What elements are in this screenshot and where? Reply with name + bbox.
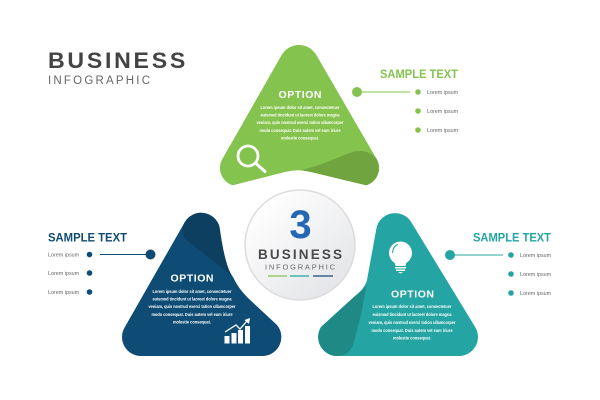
legend: blue: Lorem ipsum [48,290,80,296]
legend: blue: SAMPLE TEXT [48,230,128,244]
blue option text [148,272,236,324]
green option text [256,89,344,140]
blue option text: modo consequat. Duis autem vel eum iriure [152,312,233,317]
panel: blue option triangle [122,213,281,356]
teal option text: OPTION [391,288,434,300]
teal option text: veniam, quis nostrud exerci tation ullamcorper [368,320,456,325]
green option text: Lorem ipsum dolor sit amet, consectetuer [260,105,340,110]
page title: INFOGRAPHIC [48,75,150,87]
panel: green option triangle [220,45,379,185]
badge colour bars [268,275,333,277]
panel: teal option triangle [318,213,478,356]
legend: teal: Lorem ipsum [520,291,552,297]
center badge [245,190,355,300]
icon: growth chart [224,318,250,344]
teal option text: molestie consequat. [393,336,431,340]
teal option text [368,288,456,340]
legend: teal: Lorem ipsum [520,253,552,259]
blue option text: molestie consequat. [173,320,211,324]
teal option text: Lorem ipsum dolor sit amet, consectetuer [372,304,452,309]
icon: magnifying glass [238,146,265,172]
green option text: veniam, quis nostrud exerci tation ullamcorper [256,120,344,125]
legend: teal [445,230,552,297]
blue fold shade [183,213,232,276]
page title: BUSINESS [48,48,188,73]
green fold shade [301,151,379,185]
green option text: molestie consequat. [281,136,319,140]
legend: green [352,67,459,134]
legend: teal: Lorem ipsum [520,272,552,278]
teal option text: modo consequat. Duis autem vel eum iriure [372,328,453,333]
number 3: 3 [289,203,312,247]
blue option text: OPTION [170,272,214,284]
legend: green: Lorem ipsum [427,128,459,134]
legend: green: Lorem ipsum [427,109,459,115]
green option text: OPTION [278,89,322,101]
legend: blue [48,230,156,296]
teal option text: euismod tincidunt ut laoreet dolore magna [372,312,452,317]
green option text: euismod tincidunt ut laoreet dolore magna [260,112,340,118]
legend: green: SAMPLE TEXT [380,67,459,81]
green option text: modo consequat. Duis autem vel eum iriure [260,128,341,133]
badge subtitle: INFOGRAPHIC [265,262,336,272]
legend: green: Lorem ipsum [427,90,459,96]
blue option text: euismod tincidunt ut laoreet dolore magna [152,296,232,302]
legend: blue: Lorem ipsum [48,252,80,258]
icon: light bulb [389,242,412,274]
legend: teal: SAMPLE TEXT [473,230,552,244]
legend: blue: Lorem ipsum [48,271,80,277]
blue option text: Lorem ipsum dolor sit amet, consectetuer [152,289,232,294]
teal fold shade [318,285,366,356]
page title [48,48,188,87]
blue option text: veniam, quis nostrud exerci tation ullamcorper [148,304,236,309]
badge title: BUSINESS [258,247,342,262]
